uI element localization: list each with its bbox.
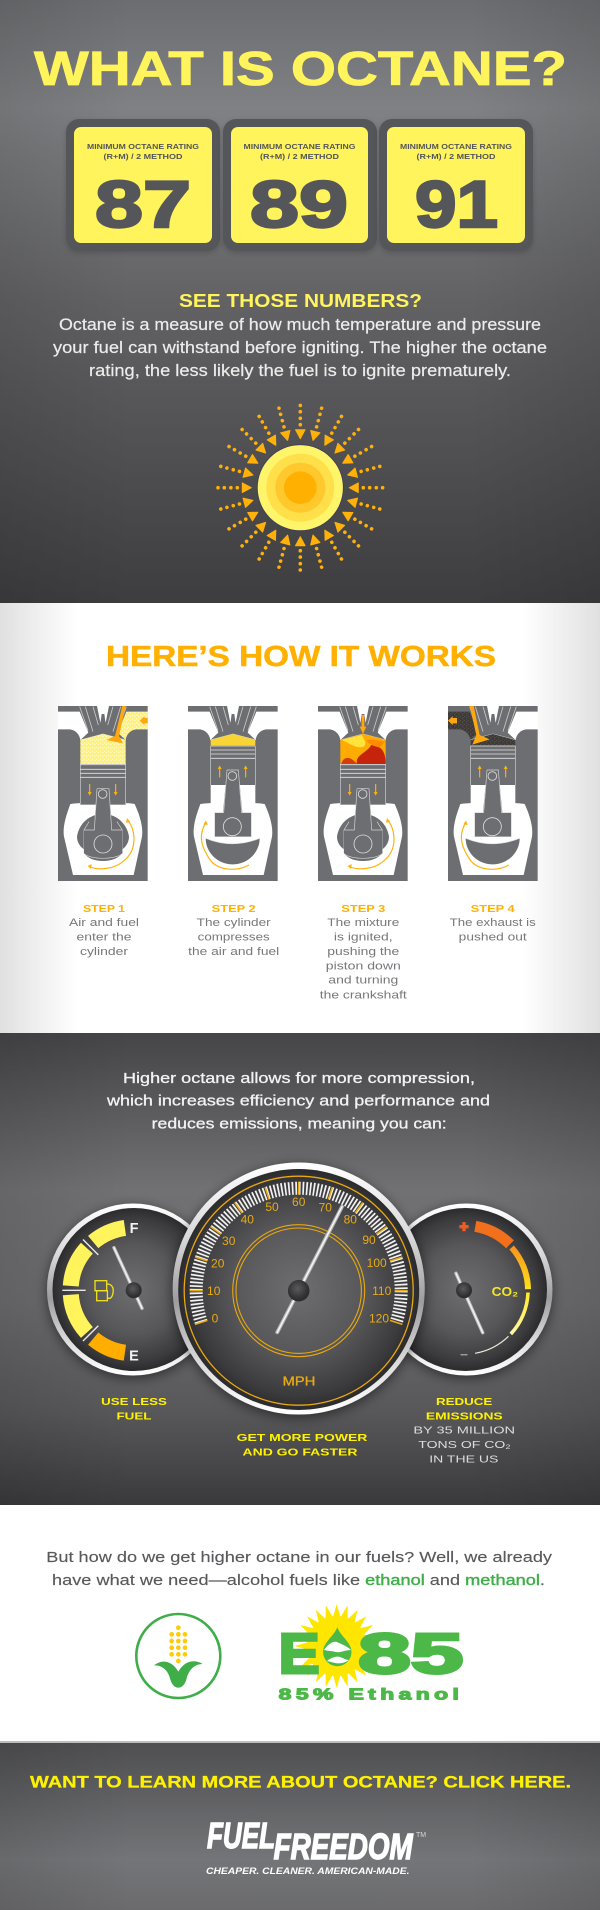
plus mark [459,1222,469,1231]
caption: get more power: GET MORE POWER [237,1433,368,1444]
octane rating 91: (R+M) / 2 METHOD [416,152,496,161]
octane rating 87: 87 [95,167,191,241]
octane rating 91 [379,119,533,251]
tick scale [190,1182,408,1326]
fuel needle [114,1248,142,1308]
octane rating 87: (R+M) / 2 METHOD [104,152,183,161]
step 3 caption: The mixture [327,917,399,929]
engine diagram: step 1 intake [58,706,148,881]
octane description [53,316,547,380]
step 2 caption: the air and fuel [188,946,279,958]
emissions needle [456,1273,483,1333]
octane rating 89 [223,119,377,251]
benefits intro text: reduces emissions, meaning you can: [152,1115,447,1132]
step 3 caption: STEP 3 [341,904,386,915]
caption: use less fuel: USE LESS [101,1397,167,1408]
caption: use less fuel [101,1397,167,1422]
speed numbers: 100 [367,1256,387,1270]
engine diagram: step 3 ignition [318,706,408,881]
benefits intro text: which increases efficiency and performance and [106,1093,490,1110]
speed numbers: 80 [344,1212,357,1226]
benefits intro text: Higher octane allows for more compression, [123,1070,475,1087]
octane rating 87: MINIMUM OCTANE RATING [87,142,199,151]
step 4 caption: pushed out [459,931,528,943]
octane rating 89: 89 [250,167,348,241]
85 numerals: 85 [358,1622,463,1686]
caption: reduce emissions: IN THE US [429,1454,498,1465]
step 3 caption: the crankshaft [320,989,408,1001]
octane rating 91: MINIMUM OCTANE RATING [400,142,512,151]
speed numbers: 10 [207,1284,221,1298]
caption: reduce emissions: TONS OF CO₂ [418,1440,511,1451]
caption: get more power: AND GO FASTER [242,1447,358,1458]
alcohol fuels text: But how do we get higher octane in our fuels? Well, we already [46,1549,553,1566]
panel: call to action footer [0,1741,600,1910]
icon: corn logo [136,1614,220,1698]
octane rating 91: 91 [415,167,498,241]
icon: sun with inward pressure arrows [216,404,384,572]
minus mark [460,1354,468,1356]
alcohol fuels text [46,1549,553,1589]
co2 label: CO₂ [492,1284,518,1299]
engine diagram: step 4 exhaust [448,706,538,881]
caption: reduce emissions [413,1397,515,1465]
benefits intro text [106,1070,490,1132]
panel: alcohol fuels [0,1505,600,1743]
step 1 caption: cylinder [80,946,128,958]
octane rating 89: MINIMUM OCTANE RATING [244,142,356,151]
octane rating 87 [66,119,220,251]
call to action text: WANT TO LEARN MORE ABOUT OCTANE? CLICK HERE. [30,1774,571,1792]
octane rating 89: (R+M) / 2 METHOD [260,152,340,161]
emissions gauge [380,1204,552,1376]
speed needle [277,1207,342,1332]
speed numbers: 50 [265,1200,279,1214]
caption: reduce emissions: BY 35 MILLION [413,1426,515,1437]
speed numbers: 60 [292,1195,306,1209]
step 2 caption: compresses [198,931,270,943]
step 1 caption: STEP 1 [83,904,125,915]
panel: benefits gauges [0,1033,600,1505]
engine diagram: step 2 compression [188,706,278,881]
85% ethanol tagline: 85% Ethanol [279,1686,463,1703]
logo: fuel freedom: TM [416,1832,426,1839]
octane description: rating, the less likely the fuel is to ignite prematurely. [89,362,511,380]
fuel gauge: F [130,1221,139,1237]
speed numbers: 40 [241,1212,254,1226]
logo: E85 [279,1604,463,1703]
speed numbers: 90 [362,1233,376,1247]
step 3 caption: pushing the [327,946,399,958]
step 4 caption: The exhaust is [450,917,536,929]
speed numbers: 30 [222,1234,236,1248]
octane description: your fuel can withstand before igniting. The higher the octane [53,339,547,357]
speedometer [173,1162,425,1414]
caption: reduce emissions: REDUCE [436,1397,492,1408]
speed numbers: 120 [369,1312,389,1326]
step 1 caption [69,904,139,958]
title: WHAT IS OCTANE? [34,43,567,96]
heading: here's how it works: HERE’S HOW IT WORKS [106,641,496,673]
caption: get more power [237,1433,368,1458]
step 1 caption: Air and fuel [69,917,139,929]
speed numbers: 110 [372,1284,392,1298]
mph label: MPH [283,1374,315,1388]
speed numbers: 20 [211,1256,225,1270]
sunburst [295,1604,379,1688]
step 3 caption [320,904,408,1001]
octane description: Octane is a measure of how much temperature and pressure [59,316,541,334]
logo: fuel freedom [206,1815,426,1877]
step 2 caption [188,904,279,958]
step 4 caption [450,904,536,943]
step 3 caption: and turning [328,975,398,987]
speed numbers: 0 [212,1312,219,1326]
logo: fuel freedom: FUEL [207,1815,275,1856]
caption: use less fuel: FUEL [116,1411,152,1422]
step 2 caption: The cylinder [197,917,271,929]
caption: reduce emissions: EMISSIONS [426,1411,503,1422]
speed numbers: 70 [319,1200,332,1214]
logo: fuel freedom: CHEAPER. CLEANER. AMERICAN-MADE. [206,1866,410,1877]
step 3 caption: piston down [326,960,401,972]
step 3 caption: is ignited, [334,931,393,943]
icon: fuel pump [95,1281,113,1301]
alcohol fuels text: have what we need—alcohol fuels like ethanol and methanol . [52,1572,545,1589]
panel: what is octane [0,0,600,603]
panel: how it works [0,603,600,1033]
E letter: E [279,1622,320,1686]
fuel gauge: E [129,1349,139,1365]
step 2 caption: STEP 2 [212,904,256,915]
fuel gauge [47,1204,219,1376]
logo: fuel freedom: FREEDOM [274,1826,413,1867]
step 1 caption: enter the [76,931,132,943]
speed numbers [207,1195,392,1326]
step 4 caption: STEP 4 [471,904,515,915]
droplet [323,1627,352,1666]
heading: see those numbers: SEE THOSE NUMBERS? [179,291,422,311]
